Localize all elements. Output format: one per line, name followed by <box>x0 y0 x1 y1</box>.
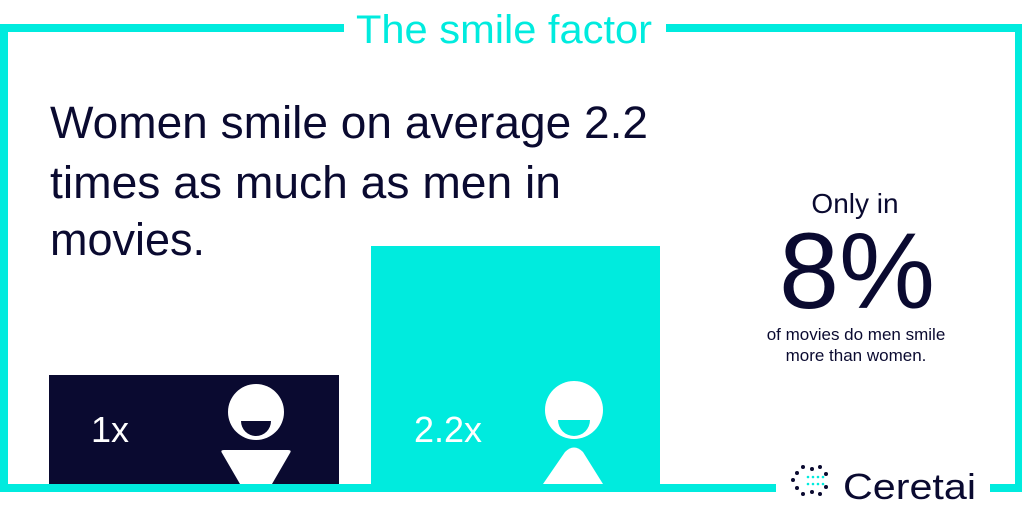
stat callout: more than women. <box>786 346 926 365</box>
heading text: times as much as men in <box>50 157 561 208</box>
stat callout: 8% <box>779 210 935 331</box>
logo: Ceretai: Ceretai <box>843 466 976 507</box>
bar: men 1x: 1x <box>91 409 129 450</box>
heading text: Women smile on average 2.2 <box>50 97 648 148</box>
bar: women 2.2x <box>371 246 660 486</box>
stat callout: Only in <box>811 188 899 219</box>
icon: man smiling <box>221 384 291 484</box>
stat callout: of movies do men smile <box>767 325 945 344</box>
heading text <box>50 97 648 265</box>
logo: Ceretai <box>791 465 976 507</box>
bar: women 2.2x: 2.2x <box>414 409 482 450</box>
bar: men 1x <box>49 375 339 484</box>
heading text: movies. <box>50 214 205 265</box>
title: The smile factor <box>356 8 652 52</box>
stat callout <box>767 188 945 365</box>
icon: woman smiling <box>543 381 603 484</box>
